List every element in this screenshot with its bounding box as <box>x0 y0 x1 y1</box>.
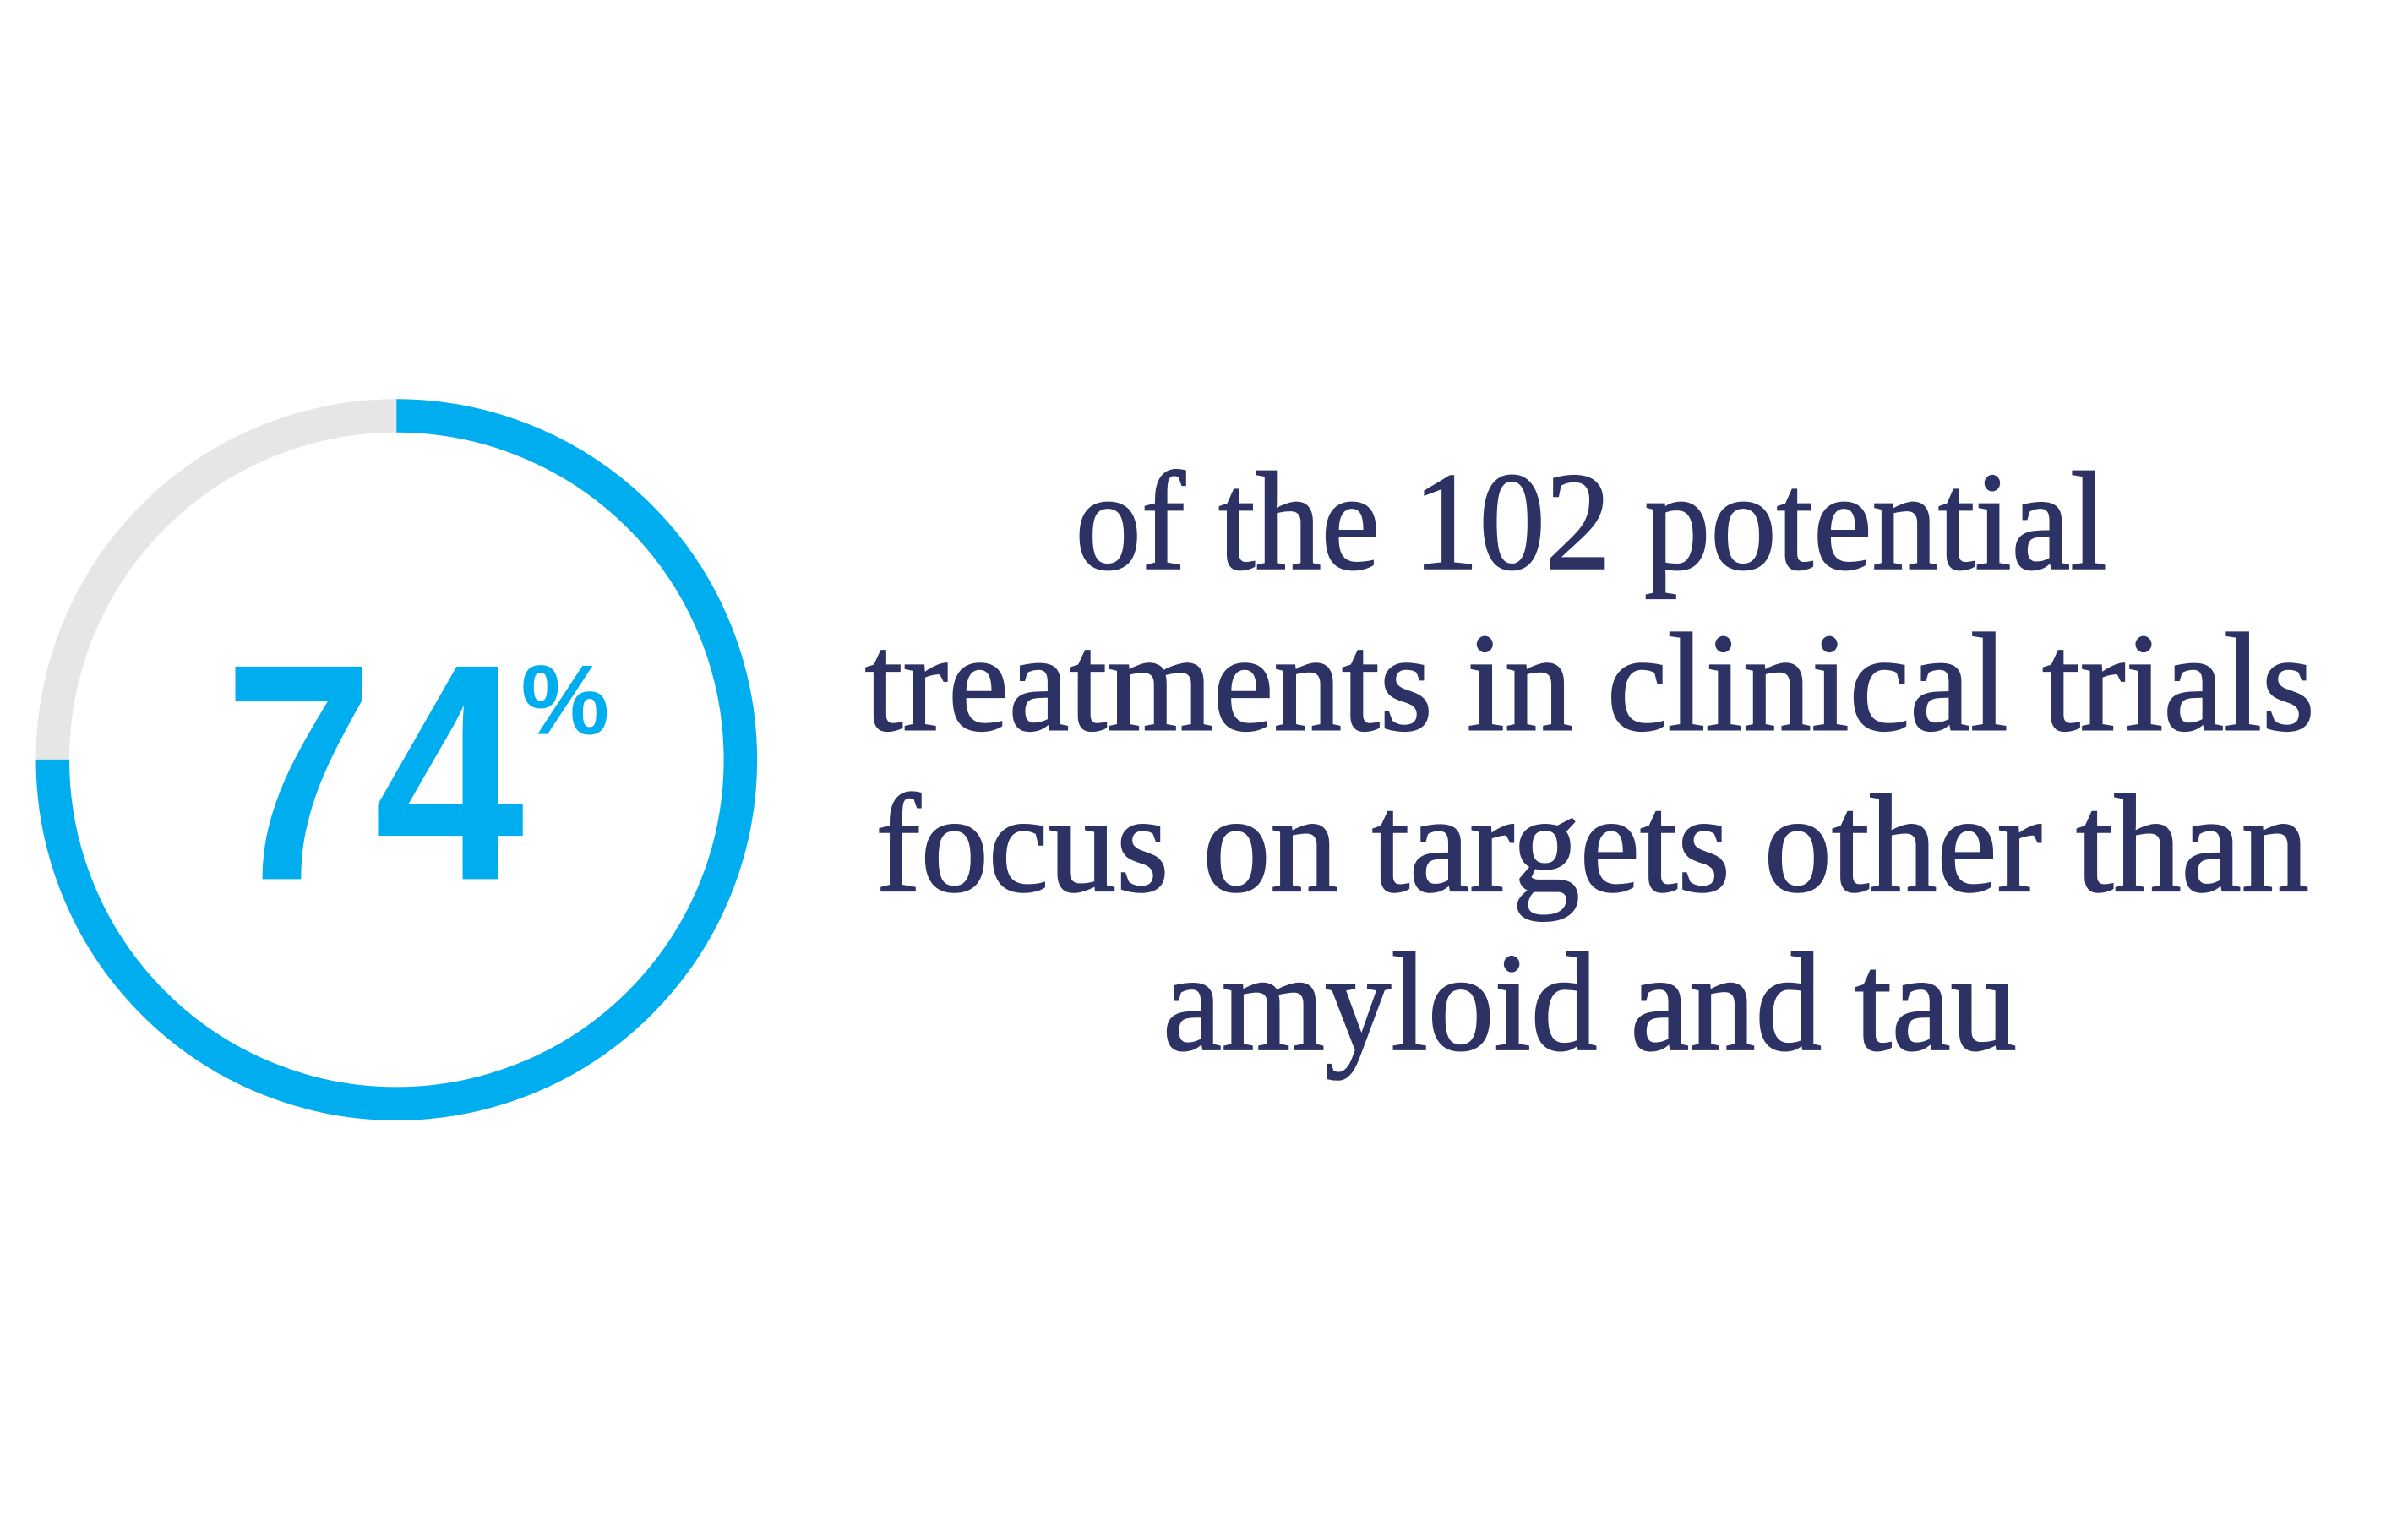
donut chart: 74% <box>52 416 740 1104</box>
description text: amyloid and tau <box>1163 924 2017 1080</box>
description text: of the 102 potential <box>1076 444 2107 599</box>
description text <box>865 444 2315 1080</box>
description text: treatments in clinical trials <box>865 605 2315 760</box>
big number: 74%: % <box>521 644 609 755</box>
big number: 74%: 74 <box>224 600 526 945</box>
description text: focus on targets other than <box>875 766 2309 921</box>
